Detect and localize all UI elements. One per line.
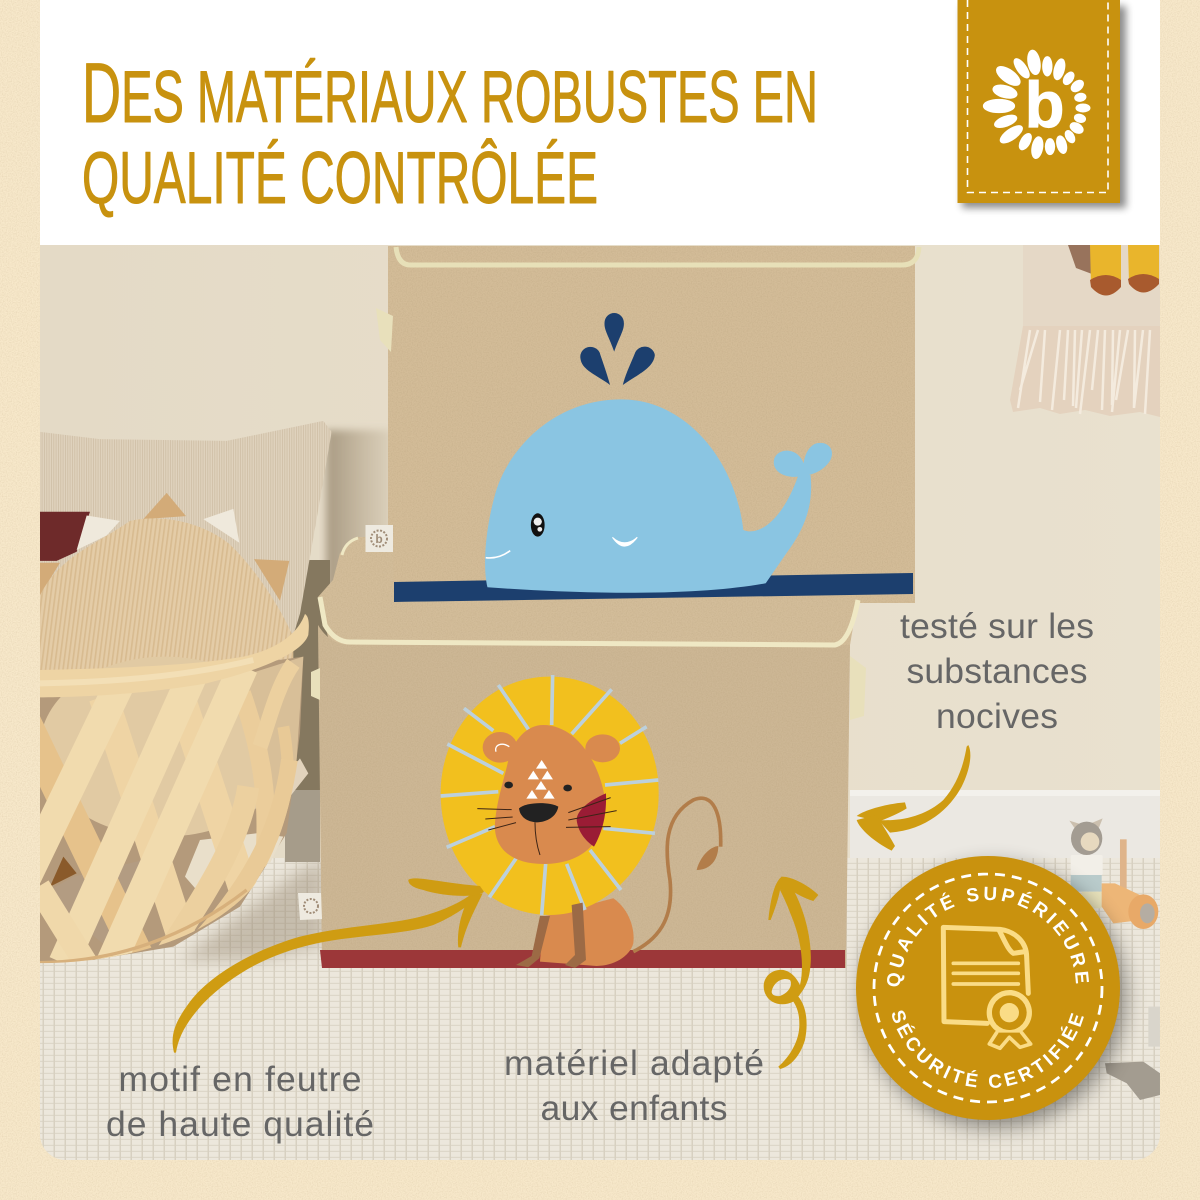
- lower label: [298, 893, 322, 920]
- skirting board: [850, 790, 1160, 860]
- arrow: to box material: [857, 745, 970, 851]
- wooden pull toy: [1102, 839, 1158, 929]
- lion body: [540, 898, 634, 966]
- cheek: [577, 793, 606, 847]
- basket slats: [20, 663, 293, 980]
- wall hanging: [1010, 245, 1160, 417]
- lid texture: [318, 537, 858, 645]
- whale smile: [612, 537, 637, 546]
- brand label: [366, 525, 393, 552]
- label: tested: testé sur les: [900, 606, 1094, 646]
- shadow beside box: [285, 430, 392, 862]
- label: child-safe: [504, 1043, 764, 1128]
- round cushion: [40, 518, 294, 670]
- basket rim: [40, 614, 309, 697]
- blocks: [1148, 1007, 1160, 1047]
- icon: sunflower logo: b: [1025, 68, 1065, 141]
- large pillow: [40, 421, 332, 634]
- cream spikes: [77, 509, 239, 550]
- arrow: to felt motif: [173, 878, 484, 1053]
- label: child-safe: aux enfants: [540, 1088, 728, 1128]
- brand label: b: [375, 532, 383, 546]
- box front: [318, 625, 850, 968]
- wall: [40, 245, 1160, 865]
- arrow: child-safe material: [764, 877, 818, 1069]
- basket: [40, 614, 309, 964]
- lion: [441, 675, 721, 968]
- toys on floor: [1069, 818, 1160, 1100]
- label: tested: [900, 606, 1094, 736]
- cushions: [40, 421, 332, 697]
- brand tag: [958, 0, 1126, 208]
- photo panel: [20, 245, 1160, 1160]
- rug: [40, 858, 1160, 1160]
- label: felt motif: [106, 1059, 374, 1144]
- header panel: [40, 0, 1160, 246]
- label: felt motif: motif en feutre: [118, 1059, 362, 1099]
- lower storage box: [298, 525, 866, 968]
- forehead triangles: [526, 760, 555, 799]
- badge text: SÉCURITÉ CERTIFIÉE: [892, 1010, 1084, 1088]
- icon: certificate: [943, 927, 1031, 1048]
- whale: [485, 313, 832, 593]
- eyes and nose: [504, 782, 513, 788]
- whale fluke: [774, 443, 832, 477]
- lid piping: [320, 597, 858, 645]
- badge text: QUALITÉ SUPÉRIEURE: [887, 886, 1089, 986]
- head: [495, 725, 605, 864]
- ears: [483, 732, 517, 763]
- whale eye: [531, 513, 545, 537]
- title: QUALITÉ CONTRÔLÉE: [82, 138, 598, 219]
- upper storage box: [376, 246, 919, 603]
- quality badge: [849, 851, 1139, 1141]
- fox stacker: [1069, 818, 1103, 908]
- maroon cushion: [40, 512, 90, 561]
- tail: [633, 798, 721, 952]
- tan spikes: [40, 493, 289, 601]
- handles: [850, 656, 866, 720]
- whiskers: [477, 798, 617, 855]
- label: tested: nocives: [936, 696, 1058, 736]
- red band: [320, 950, 845, 968]
- basket interior: [40, 657, 303, 962]
- label: tested: substances: [906, 651, 1088, 691]
- whale body: [485, 399, 811, 593]
- label: child-safe: matériel adapté: [504, 1043, 764, 1083]
- spout drops: [580, 313, 655, 385]
- cream lid piping: [396, 247, 919, 265]
- title: DES MATÉRIAUX ROBUSTES EN: [82, 46, 818, 140]
- legs: [516, 903, 586, 968]
- icon: sunflower logo: [984, 50, 1090, 159]
- navy band: [394, 573, 913, 602]
- box lid top: [318, 537, 858, 645]
- mane rays: [441, 675, 658, 915]
- label: felt motif: de haute qualité: [106, 1104, 374, 1144]
- front texture: [320, 645, 850, 950]
- title: [82, 46, 818, 219]
- seal: [989, 993, 1029, 1033]
- mane: [441, 677, 659, 915]
- badge text: [887, 886, 1089, 1088]
